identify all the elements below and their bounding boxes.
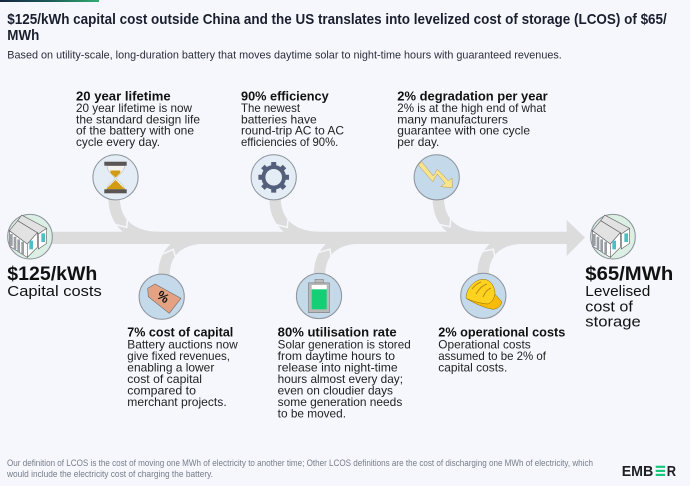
text: 2% degradation per year (397, 88, 548, 149)
text: 7% cost of capital: merchant projects. (127, 396, 227, 409)
text: 90% efficiency (241, 88, 344, 149)
main arrow (50, 198, 585, 275)
text: 2% degradation per year: many manufacturers (397, 113, 508, 126)
text: 2% operational costs: capital costs. (438, 362, 507, 374)
text: 7% cost of capital: give fixed revenues, (127, 350, 230, 363)
logo: Ember: EMB (622, 464, 653, 480)
text: 80% utilisation rate: release into night-time (278, 362, 398, 374)
text: 90% efficiency: efficiencies of 90%. (241, 136, 338, 149)
text: 80% utilisation rate: from daytime hours to (278, 350, 395, 363)
end value: cost of (585, 298, 634, 315)
text: 90% efficiency: round-trip AC to AC (241, 125, 344, 138)
text: 80% utilisation rate: some generation needs (278, 396, 402, 409)
icon: battery level (296, 273, 342, 319)
end value: $65/MWh (585, 264, 673, 285)
text: 20 year lifetime: cycle every day. (76, 136, 160, 149)
text: 2% operational costs: 2% operational costs (438, 325, 565, 340)
text: 90% efficiency: 90% efficiency (241, 88, 329, 103)
footnote: Our definition of LCOS is the cost of moving one MWh of electricity to another time; Other LCOS definitions are the cost of discharging one MWh of electricity, which (7, 458, 593, 468)
start value: $125/kWh (7, 264, 97, 285)
end value: Levelised (585, 283, 650, 300)
icon: gear (251, 155, 296, 200)
end value (585, 264, 673, 330)
text: 20 year lifetime: 20 year lifetime is now (76, 102, 193, 115)
footnote: would include the electricity cost of charging the battery. (6, 469, 213, 479)
end value: storage (585, 314, 641, 330)
logo: Ember: R (667, 464, 676, 480)
text: 2% degradation per year: 2% is at the high end of what (397, 102, 547, 115)
text: 80% utilisation rate: Solar generation is stored (278, 339, 411, 352)
text: 7% cost of capital: enabling a lower (127, 362, 214, 374)
text: 90% efficiency: The newest (241, 102, 301, 115)
text: 2% degradation per year: guarantee with one cycle (397, 125, 530, 138)
start value: Capital costs (7, 283, 102, 300)
text: 80% utilisation rate: 80% utilisation rate (278, 325, 397, 340)
text: 2% degradation per year: per day. (397, 136, 439, 149)
title: MWh (7, 27, 39, 44)
title (7, 11, 668, 44)
text: 7% cost of capital: 7% cost of capital (127, 325, 233, 340)
text: 2% operational costs: assumed to be 2% of (438, 350, 547, 363)
text: 20 year lifetime: of the battery with one (76, 125, 194, 138)
branch notches (113, 216, 496, 261)
text: 80% utilisation rate: even on cloudier days (278, 384, 393, 398)
icon: price tag: % (154, 287, 173, 306)
text: 90% efficiency: batteries have (241, 113, 317, 126)
text: 7% cost of capital: compared to (127, 384, 196, 398)
text: 2% operational costs: Operational costs (438, 339, 531, 352)
text: 80% utilisation rate (278, 325, 411, 420)
top accent bar (0, 0, 99, 2)
icon: end battery pack (591, 214, 635, 259)
subtitle: Based on utility-scale, long-duration battery that moves daytime solar to night-time hours with guaranteed revenues. (7, 49, 562, 61)
icon: price tag (139, 274, 184, 319)
icon: start battery pack (8, 214, 52, 259)
text: 80% utilisation rate: hours almost every day; (278, 373, 403, 386)
start value (7, 264, 102, 300)
text: 20 year lifetime: the standard design life (76, 113, 200, 126)
footnote (6, 458, 593, 479)
text: 2% degradation per year: 2% degradation per year (397, 88, 548, 103)
icon: hard hat (461, 273, 506, 318)
icon: hourglass (93, 155, 138, 200)
logo: Ember (622, 464, 676, 480)
text: 7% cost of capital: Battery auctions now (127, 339, 238, 352)
text: 80% utilisation rate: to be moved. (278, 408, 346, 420)
text: 7% cost of capital (127, 325, 238, 409)
icon: declining arrow (414, 155, 459, 200)
text: 2% operational costs (438, 325, 565, 374)
text: 20 year lifetime (76, 88, 200, 149)
text: 7% cost of capital: cost of capital (127, 373, 202, 386)
text: 20 year lifetime: 20 year lifetime (76, 88, 171, 103)
branch connectors (114, 198, 525, 275)
